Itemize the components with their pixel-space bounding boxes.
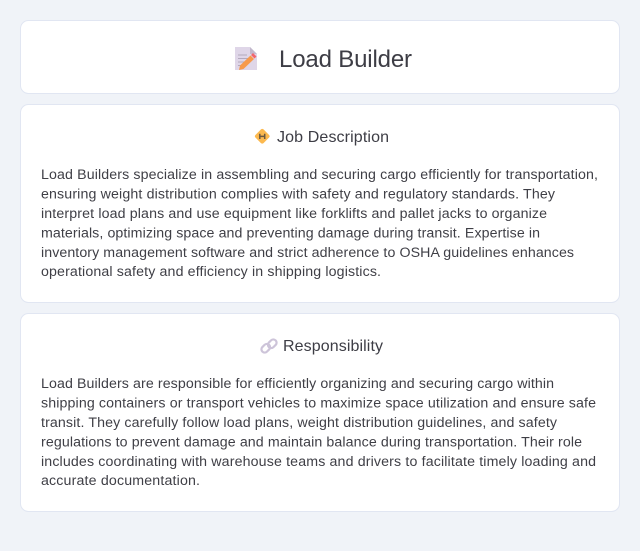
text block: job description: Load Builders specialize in assembling and securing cargo efficiently for transportation, [41, 167, 598, 183]
text block: responsibility: accurate documentation. [41, 473, 200, 489]
heading: responsibility: Responsibility [283, 338, 383, 355]
text block: responsibility [41, 376, 596, 489]
icon: chain link [260, 338, 278, 354]
text block: responsibility: transit. They carefully follow load plans, weight distribution guidelines, and safety [41, 415, 558, 431]
text block: job description: materials, optimizing space and preventing damage during transit. Expertise in [41, 226, 540, 242]
text block: job description: operational safety and efficiency in shipping logistics. [41, 264, 381, 280]
text block: job description: inventory management software and strict adherence to OSHA guidelines enhances [41, 245, 574, 261]
panel: responsibility [20, 314, 620, 512]
text block: responsibility: regulations to prevent damage and maintain balance during transportation. Their role [41, 434, 582, 450]
panel: job description [20, 104, 620, 302]
icon: road sign diamond [254, 128, 270, 144]
text block: responsibility: includes coordinating with warehouse teams and drivers to facilitate timely loading and [41, 454, 596, 470]
text block: job description: ensuring weight distribution complies with safety and regulatory standards. They [41, 186, 556, 202]
text block: job description [41, 167, 598, 280]
heading: job description: Job Description [277, 129, 389, 146]
text block: responsibility: shipping containers or transport vehicles to maximize space utilization and ensure safe [41, 396, 596, 412]
text block: responsibility: Load Builders are responsible for efficiently organizing and securing cargo within [41, 376, 554, 392]
title: Load Builder [279, 46, 412, 73]
panel: title card [20, 20, 620, 94]
text block: job description: interpret load plans and use equipment like forklifts and pallet jacks to organize [41, 206, 547, 222]
icon: document with pencil [235, 47, 257, 70]
